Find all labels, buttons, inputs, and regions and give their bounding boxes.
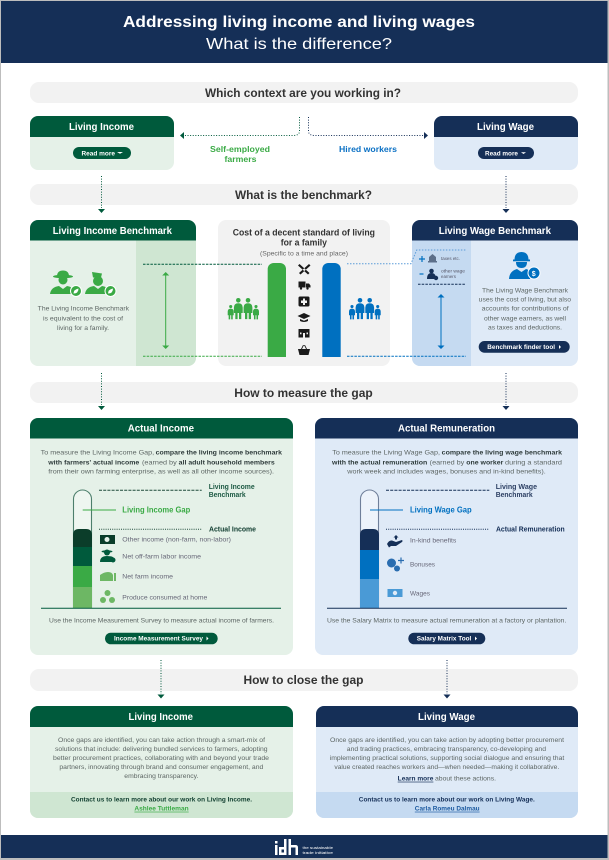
label: actual remuneration: Actual Remuneration <box>496 525 565 534</box>
tagline <box>302 845 334 855</box>
section heading: benchmark <box>30 184 578 205</box>
text: living wage actions <box>330 737 564 783</box>
text: how to measure living income gap: (earned by <box>142 460 178 467</box>
icons: cost of living items <box>298 264 310 355</box>
button: read more <box>478 147 534 159</box>
text: living wage benchmark description: The Living Wage Benchmark <box>482 288 569 295</box>
icon: family blue <box>349 298 381 319</box>
legend: wages: Wages <box>410 591 431 598</box>
contact: living wage <box>359 797 535 813</box>
text: how to measure living income gap: all adult household members <box>179 460 275 467</box>
arrow: down to actual remuneration <box>502 373 510 410</box>
label: living wage benchmark: Benchmark <box>496 490 533 499</box>
title: Addressing living income and living wages <box>123 14 475 31</box>
section heading: benchmark: What is the benchmark? <box>235 190 372 202</box>
text: how to measure living wage gap: with the actual remuneration <box>331 460 427 467</box>
panel: living wage benchmark: Living Wage Benchmark <box>439 226 551 237</box>
arrow: down to living income actions <box>158 660 164 698</box>
footer banner <box>1 835 608 858</box>
text: living wage benchmark description: other wage earners, as well <box>484 316 567 323</box>
text: living income actions <box>53 737 269 780</box>
contact: living income <box>71 797 252 813</box>
label: minus other wage earners <box>420 269 466 280</box>
button: read more <box>73 147 131 159</box>
tagline: the sustainable <box>302 845 334 850</box>
label: self-employed farmers <box>210 144 270 164</box>
bar: living wage <box>322 263 341 357</box>
section heading: context <box>30 82 578 103</box>
arrow: benchmark height <box>438 294 444 349</box>
panel: living income context: Living Income <box>69 122 134 133</box>
button: salary matrix tool: Salary Matrix Tool <box>417 636 471 643</box>
label: living income benchmark: Living Income <box>209 482 255 491</box>
section heading: close the gap <box>30 669 578 691</box>
text: living wage actions: value created reaches workers and—when needed—making it collaborative. <box>334 764 559 771</box>
text: living income benchmark description: The Living Income Benchmark <box>38 306 130 313</box>
label: minus other wage earners: other wage <box>441 269 466 274</box>
text: how to measure living wage gap: (earned by <box>430 460 465 467</box>
text: living wage actions: implementing practical solutions, supporting social dialogue and ensuring that <box>330 755 564 762</box>
contact: living wage: Carla Romeu Dalmau <box>415 806 480 813</box>
button: benchmark finder tool <box>479 341 570 353</box>
text: living wage benchmark description: as taxes and deductions. <box>488 325 562 332</box>
button: read more: Read more <box>485 150 518 158</box>
label: self-employed farmers: farmers <box>224 154 257 164</box>
button: income measurement survey: Income Measurement Survey <box>114 636 203 643</box>
legend: bonuses: Bonuses <box>410 562 436 569</box>
arrow: down to living wage actions <box>444 660 450 698</box>
label: living wage benchmark: Living Wage <box>496 482 537 491</box>
legend: farm income: Net farm income <box>122 574 173 581</box>
legend: wages <box>388 589 431 598</box>
arrow: down to living income benchmark <box>98 176 105 213</box>
text: living wage benchmark description <box>479 288 571 332</box>
panel: living wage actions: Living Wage <box>418 712 475 723</box>
label: plus taxes: taxes etc. <box>441 256 460 261</box>
text: how to measure living wage gap: To measure the Living Wage Gap, <box>332 450 440 457</box>
text: living income actions: better procurement practices, collaborating with and beyond your trade <box>53 755 269 762</box>
label: living income benchmark: Benchmark <box>209 490 246 499</box>
text: living wage actions: Learn more <box>398 776 434 783</box>
legend: produce consumed at home <box>100 590 208 603</box>
legend: in-kind benefits: In-kind benefits <box>410 537 457 544</box>
icon: farmers <box>50 270 116 297</box>
text: how to measure living wage gap: compare the living wage benchmark <box>442 450 562 457</box>
button: income measurement survey <box>105 633 218 644</box>
text: living income actions: solutions that include: delivering bundled services to farmers, adopting <box>55 746 268 753</box>
panel: living income benchmark <box>30 220 196 366</box>
chart: remuneration thermometer <box>360 490 379 608</box>
label: actual income: Actual Income <box>209 525 256 534</box>
legend: produce consumed at home: Produce consumed at home <box>122 595 208 602</box>
label: living income gap: Living Income Gap <box>122 506 190 515</box>
text: living wage benchmark description: uses the cost of living, but also <box>479 297 571 304</box>
heading: cost of living <box>233 228 375 248</box>
panel: actual income <box>30 418 293 655</box>
text: how to measure living wage gap: work week and includes wages, bonuses and in-kind benefits). <box>346 469 546 476</box>
panel: living income actions: Living Income <box>128 712 193 723</box>
text: how to measure living income gap: from their own farming enterprise, as well as all other income sources). <box>48 469 274 476</box>
panel: living wage context: Living Wage <box>477 122 534 133</box>
text: living wage benchmark description: accounts for contributions of <box>482 306 569 313</box>
label: living income benchmark <box>209 482 255 499</box>
legend: off-farm labor income <box>100 550 201 562</box>
arrow: to self-employed farmers <box>180 117 300 139</box>
label: living wage benchmark <box>496 482 537 499</box>
subtitle: What is the difference? <box>206 36 392 53</box>
arrow: down to living wage benchmark <box>502 176 510 213</box>
icon: family green <box>228 298 259 319</box>
panel: living income context <box>30 116 174 170</box>
legend: bonuses <box>387 558 436 572</box>
text: salary matrix note: Use the Salary Matrix to measure actual remuneration at a factory or plantation. <box>327 618 566 625</box>
text: how to measure living wage gap: during a standard <box>505 460 562 467</box>
text: living wage actions: Once gaps are identified, you can take action by adopting better procurement <box>330 737 564 744</box>
panel: actual remuneration: Actual Remuneration <box>398 424 495 435</box>
contact: living wage: Contact us to learn more about our work on Living Wage. <box>359 797 535 804</box>
text: how to measure living income gap: To measure the Living Income Gap, <box>41 450 154 457</box>
text: how to measure living income gap: compare the living income benchmark <box>156 450 282 457</box>
button: salary matrix tool <box>408 633 485 644</box>
panel: actual remuneration <box>315 418 578 655</box>
label: minus other wage earners: earners <box>441 274 457 279</box>
section heading: measure the gap <box>30 382 578 403</box>
tagline: trade initiative <box>302 850 334 855</box>
heading: cost of living: for a family <box>281 238 327 248</box>
panel: living income actions <box>30 706 293 818</box>
legend: off-farm labor income: Net off-farm labor income <box>122 554 201 561</box>
panel: living wage benchmark <box>412 220 578 366</box>
note: specific to time and place: (Specific to a time and place) <box>260 251 348 258</box>
heading: cost of living: Cost of a decent standard of living <box>233 228 375 238</box>
button: read more: Read more <box>82 150 115 158</box>
text: income measurement survey note: Use the Income Measurement Survey to measure actual income of farmers. <box>49 618 274 625</box>
label: plus taxes <box>419 254 460 262</box>
chart: income thermometer <box>73 490 92 608</box>
legend: in-kind benefits <box>387 535 457 548</box>
legend: farm income <box>100 572 173 581</box>
legend: other income <box>100 535 231 544</box>
panel: living income benchmark: Living Income Benchmark <box>53 226 172 237</box>
label: hired workers: Hired workers <box>339 144 397 154</box>
text: living income benchmark description: living for a family. <box>57 325 109 332</box>
legend: other income: Other income (non-farm, non-labor) <box>122 536 231 543</box>
section heading: context: Which context are you working in? <box>205 88 401 100</box>
text: living income benchmark description <box>38 306 130 332</box>
panel: living wage context <box>434 116 578 170</box>
contact: living income: Contact us to learn more about our work on Living Income. <box>71 797 252 804</box>
section heading: close the gap: How to close the gap <box>244 675 364 687</box>
icon: worker: $ <box>532 271 536 278</box>
label: living income gap <box>83 506 190 515</box>
contact: living income: Ashlee Tuttleman <box>134 806 189 813</box>
arrow: down to actual income <box>98 373 105 410</box>
panel: living wage actions <box>316 706 578 818</box>
text: how to measure living wage gap: one worker <box>466 460 504 467</box>
text: how to measure living income gap: with farmers' actual income <box>47 460 140 467</box>
text: how to measure living income gap <box>41 450 282 476</box>
arrow: to hired workers <box>308 117 428 139</box>
logo: idh <box>275 839 298 855</box>
panel: actual income: Actual Income <box>128 424 194 435</box>
text: living wage actions: and trading practices, embracing transparency, co-developing and <box>347 746 546 753</box>
arrow: benchmark height <box>162 272 169 349</box>
text: living wage actions: about these actions. <box>435 776 496 783</box>
text: how to measure living wage gap <box>331 450 562 476</box>
text: living income actions: Once gaps are identified, you can take action through a smart-mix of <box>58 737 265 744</box>
bar: living income <box>268 263 286 357</box>
text: living income actions: embracing transparency. <box>124 773 199 780</box>
text: living income actions: partners, innovating through brand and consumer engagement, and <box>59 764 264 771</box>
label: living wage gap <box>370 506 472 515</box>
label: living wage gap: Living Wage Gap <box>410 506 472 515</box>
text: living income benchmark description: is equivalent to the cost of <box>43 316 123 323</box>
button: benchmark finder tool: Benchmark finder tool <box>487 344 555 351</box>
header banner <box>1 1 608 63</box>
panel: cost of a decent standard of living <box>218 220 390 366</box>
label: self-employed farmers: Self-employed <box>210 144 270 154</box>
icon: worker <box>509 252 540 280</box>
section heading: measure the gap: How to measure the gap <box>234 388 373 400</box>
